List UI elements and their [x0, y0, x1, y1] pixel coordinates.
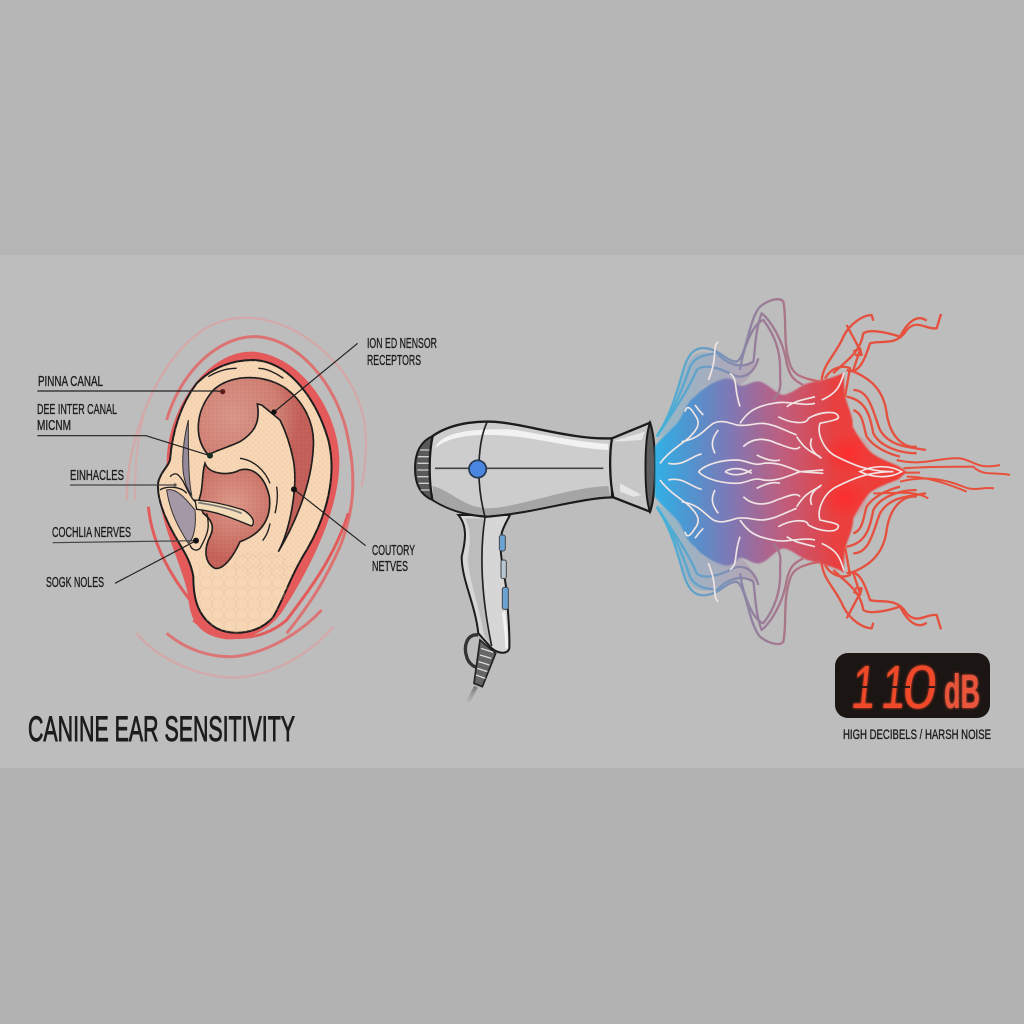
hot spot upper [823, 432, 873, 475]
ear outline [158, 360, 332, 633]
segment gaps [849, 686, 935, 688]
leader lines [37, 343, 366, 583]
centre vein loop [860, 467, 902, 477]
ear labels [37, 335, 437, 591]
label dots [173, 389, 297, 544]
handle [458, 515, 510, 653]
cord loop [465, 635, 478, 667]
nozzle opening [645, 423, 655, 512]
background bottom band [0, 768, 1024, 1024]
upper concha texture [198, 378, 313, 552]
dryer rear vent [415, 436, 433, 500]
upper concha [198, 378, 313, 552]
upper plume lines [657, 299, 941, 473]
blue outer haze [656, 352, 755, 591]
label: micnm: MICNM [37, 417, 71, 434]
handle shading [465, 518, 491, 646]
label: sogk noles: SOGK NOLES [46, 574, 104, 591]
nozzle highlight [615, 432, 645, 497]
lower concha texture [199, 463, 270, 568]
label: cochlia nerves: COCHLIA NERVES [52, 524, 131, 541]
background middle panel [0, 255, 1024, 768]
label: netves: NETVES [372, 558, 408, 575]
hot spot lower [820, 477, 870, 520]
sound rings around ear [127, 318, 366, 678]
nozzle [610, 423, 654, 512]
ear canal tube [195, 500, 253, 526]
display digits: 1 [879, 654, 909, 722]
barrel seam [479, 422, 487, 517]
cord [468, 687, 476, 702]
hair dryer [415, 422, 655, 702]
display unit: dB [944, 666, 980, 719]
strain relief [474, 640, 496, 687]
red halo behind ear [158, 352, 339, 639]
label: receptors: RECEPTORS [367, 352, 421, 369]
lower plume lines [657, 470, 941, 644]
decibel display [835, 653, 990, 722]
display digits [849, 653, 941, 722]
heat and noise plume [655, 299, 1010, 644]
ear diagram [37, 318, 366, 678]
upper membrane [183, 420, 192, 495]
label: pinna canal: PINNA CANAL [38, 373, 103, 390]
dryer barrel [430, 422, 612, 517]
barrel highlight [435, 429, 608, 450]
barrel lower shade [433, 486, 610, 515]
label: coutory: COUTORY [372, 542, 415, 559]
display digits: 1 [849, 654, 879, 722]
handle highlight [502, 610, 508, 648]
handle seam [482, 517, 492, 646]
lower membrane [167, 490, 195, 543]
label: ion ed nensor: ION ED NENSOR [367, 335, 437, 352]
earlobe cells [195, 552, 297, 633]
plume body [655, 373, 907, 573]
title: CANINE EAR SENSITIVITY [28, 710, 295, 749]
vent ribs [417, 450, 431, 490]
display panel [835, 653, 990, 718]
strain relief ribs [476, 648, 493, 678]
lower concha [199, 463, 270, 568]
background top band [0, 0, 1024, 255]
barrel centre line [435, 466, 603, 471]
handle buttons [499, 535, 508, 609]
power button [469, 460, 486, 478]
right tip streamers [873, 458, 1010, 498]
label: dee inter canal: DEE INTER CANAL [37, 401, 117, 418]
label: einhacles: EINHACLES [70, 467, 124, 484]
canal inner line [198, 503, 242, 513]
inner fold lines [160, 368, 283, 550]
display digits: 0 [900, 653, 941, 721]
ear skin texture [158, 360, 332, 580]
